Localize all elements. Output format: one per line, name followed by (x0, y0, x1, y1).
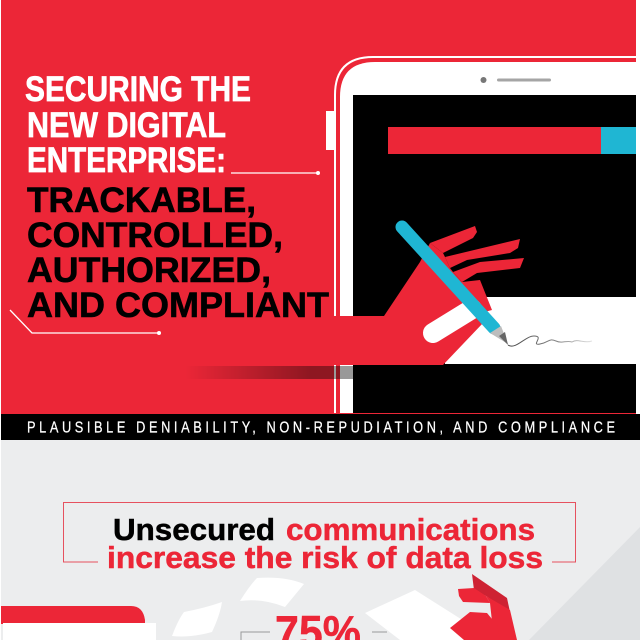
illustration: hand holding pencil (320, 226, 524, 365)
panel: grey lower background (1, 440, 640, 640)
title: white heading: ENTERPRISE: (27, 141, 226, 180)
title: white heading: NEW DIGITAL (27, 106, 226, 145)
illustration: flying papers (172, 578, 483, 640)
heading: unsecured communications (64, 502, 576, 575)
decorative corner: grey triangle (529, 527, 640, 640)
title: black heading: AND COMPLIANT (27, 286, 329, 325)
illustration: tablet (326, 57, 636, 413)
title: black heading: CONTROLLED, (27, 216, 283, 255)
connector line: title (231, 171, 320, 175)
heading: unsecured communications: communications (286, 512, 535, 547)
heading: unsecured communications: Unsecured (113, 512, 275, 547)
connector line: lower (10, 310, 161, 335)
heading: unsecured communications: increase the risk of data loss (107, 540, 543, 575)
title: black heading (27, 181, 329, 325)
statistic: 75% (241, 606, 387, 640)
illustration: signature (508, 336, 592, 346)
title: white heading (25, 70, 251, 180)
title: white heading: SECURING THE (25, 70, 251, 109)
title: black heading: TRACKABLE, (27, 181, 256, 220)
illustration: document card (1, 606, 156, 640)
subtitle band: PLAUSIBLE DENIABILITY, NON-REPUDIATION, AND COMPLIANCE (27, 419, 615, 437)
title: black heading: AUTHORIZED, (27, 251, 271, 290)
illustration: red hand bottom right (450, 574, 517, 640)
subtitle band (1, 414, 640, 440)
illustration: arm shadow (185, 366, 353, 379)
panel: red hero background (1, 0, 636, 414)
